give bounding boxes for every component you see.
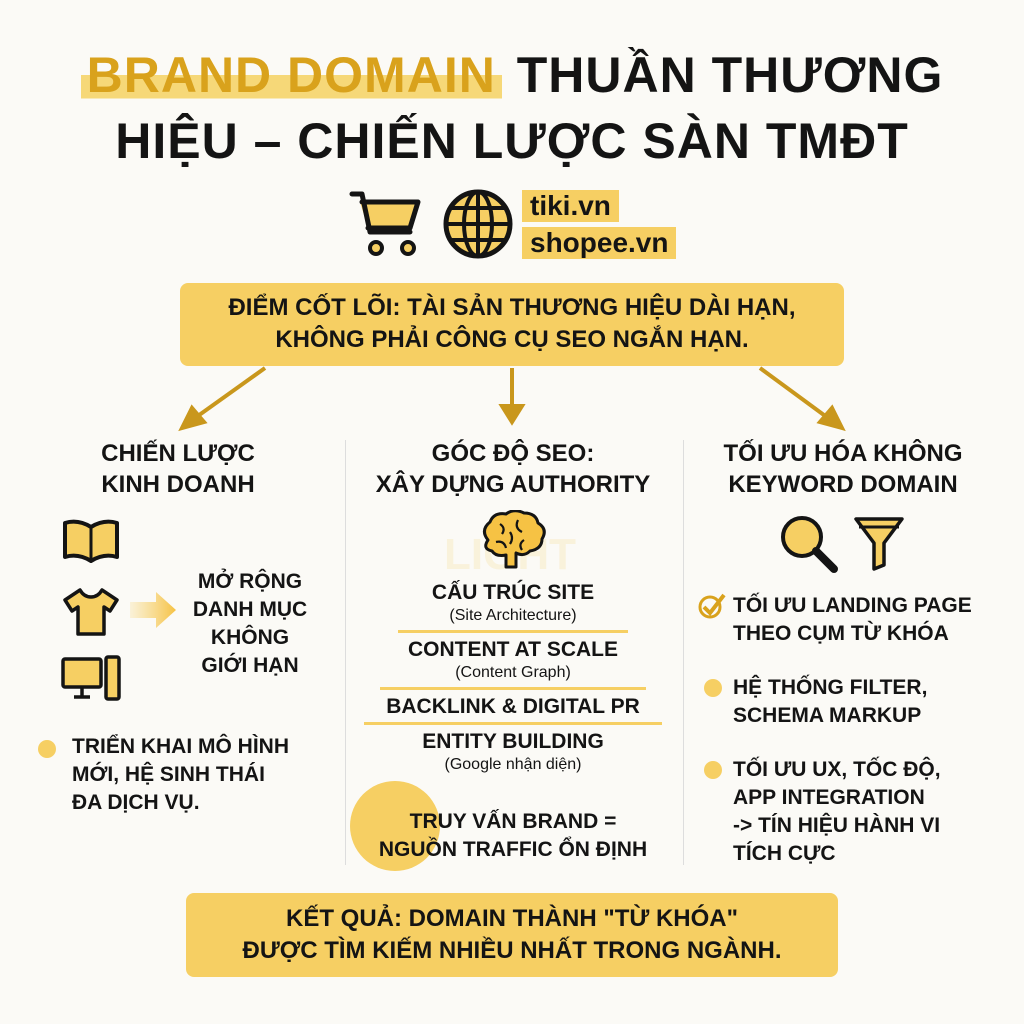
- title: HIỆU – CHIẾN LƯỢC SÀN TMĐT: [115, 113, 909, 169]
- watermark: LIGHT: [444, 530, 576, 579]
- check item: [698, 594, 726, 618]
- domain labels: tiki.vn: [530, 190, 611, 221]
- dividers: [345, 440, 346, 865]
- result box: KẾT QUẢ: DOMAIN THÀNH "TỪ KHÓA": [286, 905, 738, 932]
- callout: [350, 781, 440, 871]
- heading: [723, 439, 962, 498]
- text: [193, 568, 307, 677]
- heading: [376, 439, 650, 498]
- panel: optimization: TỐI ƯU LANDING PAGE: [733, 594, 972, 617]
- panel: SEO angle: TRUY VẤN BRAND =: [410, 810, 616, 833]
- heading: [101, 440, 255, 498]
- arrows: [178, 366, 846, 432]
- core box: KHÔNG PHẢI CÔNG CỤ SEO NGẮN HẠN.: [275, 326, 749, 353]
- heading: KINH DOANH: [101, 471, 255, 498]
- panel: business strategy: ĐA DỊCH VỤ.: [72, 791, 200, 814]
- text: DANH MỤC: [193, 598, 307, 621]
- panel: business strategy: MỚI, HỆ SINH THÁI: [72, 763, 265, 786]
- item list: (Google nhận diện): [444, 756, 581, 773]
- icon: cart: [350, 192, 420, 256]
- item list: [364, 580, 662, 773]
- text: GIỚI HẠN: [201, 654, 299, 677]
- panel: SEO angle: [350, 439, 662, 871]
- text: KHÔNG: [211, 626, 289, 649]
- panel: business strategy: TRIỂN KHAI MÔ HÌNH: [72, 735, 289, 758]
- panel: optimization: TỐI ƯU UX, TỐC ĐỘ,: [733, 758, 941, 781]
- panel: business strategy: [38, 440, 307, 814]
- result box: ĐƯỢC TÌM KIẾM NHIỀU NHẤT TRONG NGÀNH.: [242, 937, 782, 964]
- domain labels: shopee.vn: [530, 227, 668, 258]
- panel: optimization: [698, 439, 972, 865]
- panel: optimization: TÍCH CỰC: [733, 842, 836, 865]
- bullet 3: [704, 761, 722, 779]
- icon: computer: [61, 655, 121, 701]
- bullet: [38, 740, 56, 758]
- item list: (Site Architecture): [449, 607, 577, 624]
- icon: book: [63, 520, 119, 563]
- icon: brain: [482, 510, 546, 568]
- icon: funnel: [854, 517, 904, 571]
- heading: GÓC ĐỘ SEO:: [432, 440, 594, 467]
- icon: globe: [444, 190, 512, 258]
- domain labels: [522, 190, 676, 259]
- item list: CONTENT AT SCALE: [408, 638, 618, 661]
- panel: optimization: HỆ THỐNG FILTER,: [733, 676, 927, 699]
- title: [81, 47, 943, 169]
- heading: CHIẾN LƯỢC: [101, 440, 255, 467]
- text: MỞ RỘNG: [198, 570, 302, 593]
- core box: [180, 283, 844, 366]
- panel: optimization: SCHEMA MARKUP: [733, 704, 921, 727]
- panel: optimization: THEO CỤM TỪ KHÓA: [733, 622, 949, 645]
- item list: ENTITY BUILDING: [422, 730, 604, 753]
- heading: XÂY DỰNG AUTHORITY: [376, 471, 650, 498]
- bullet 2: [704, 679, 722, 697]
- item list: BACKLINK & DIGITAL PR: [386, 695, 640, 718]
- item list: CẤU TRÚC SITE: [432, 581, 594, 604]
- core box: ĐIỂM CỐT LÕI: TÀI SẢN THƯƠNG HIỆU DÀI HẠN,: [228, 294, 796, 321]
- icon: shirt: [63, 588, 119, 636]
- heading: KEYWORD DOMAIN: [728, 471, 958, 498]
- panel: optimization: -> TÍN HIỆU HÀNH VI: [733, 814, 940, 837]
- panel: optimization: APP INTEGRATION: [733, 786, 925, 809]
- title: BRAND DOMAIN THUẦN THƯƠNG: [87, 47, 943, 103]
- item list: (Content Graph): [455, 664, 571, 681]
- arrow: [130, 592, 176, 628]
- panel: SEO angle: NGUỒN TRAFFIC ỔN ĐỊNH: [379, 838, 647, 861]
- result box: [186, 893, 838, 977]
- icon: magnifier: [781, 516, 838, 573]
- heading: TỐI ƯU HÓA KHÔNG: [723, 440, 962, 467]
